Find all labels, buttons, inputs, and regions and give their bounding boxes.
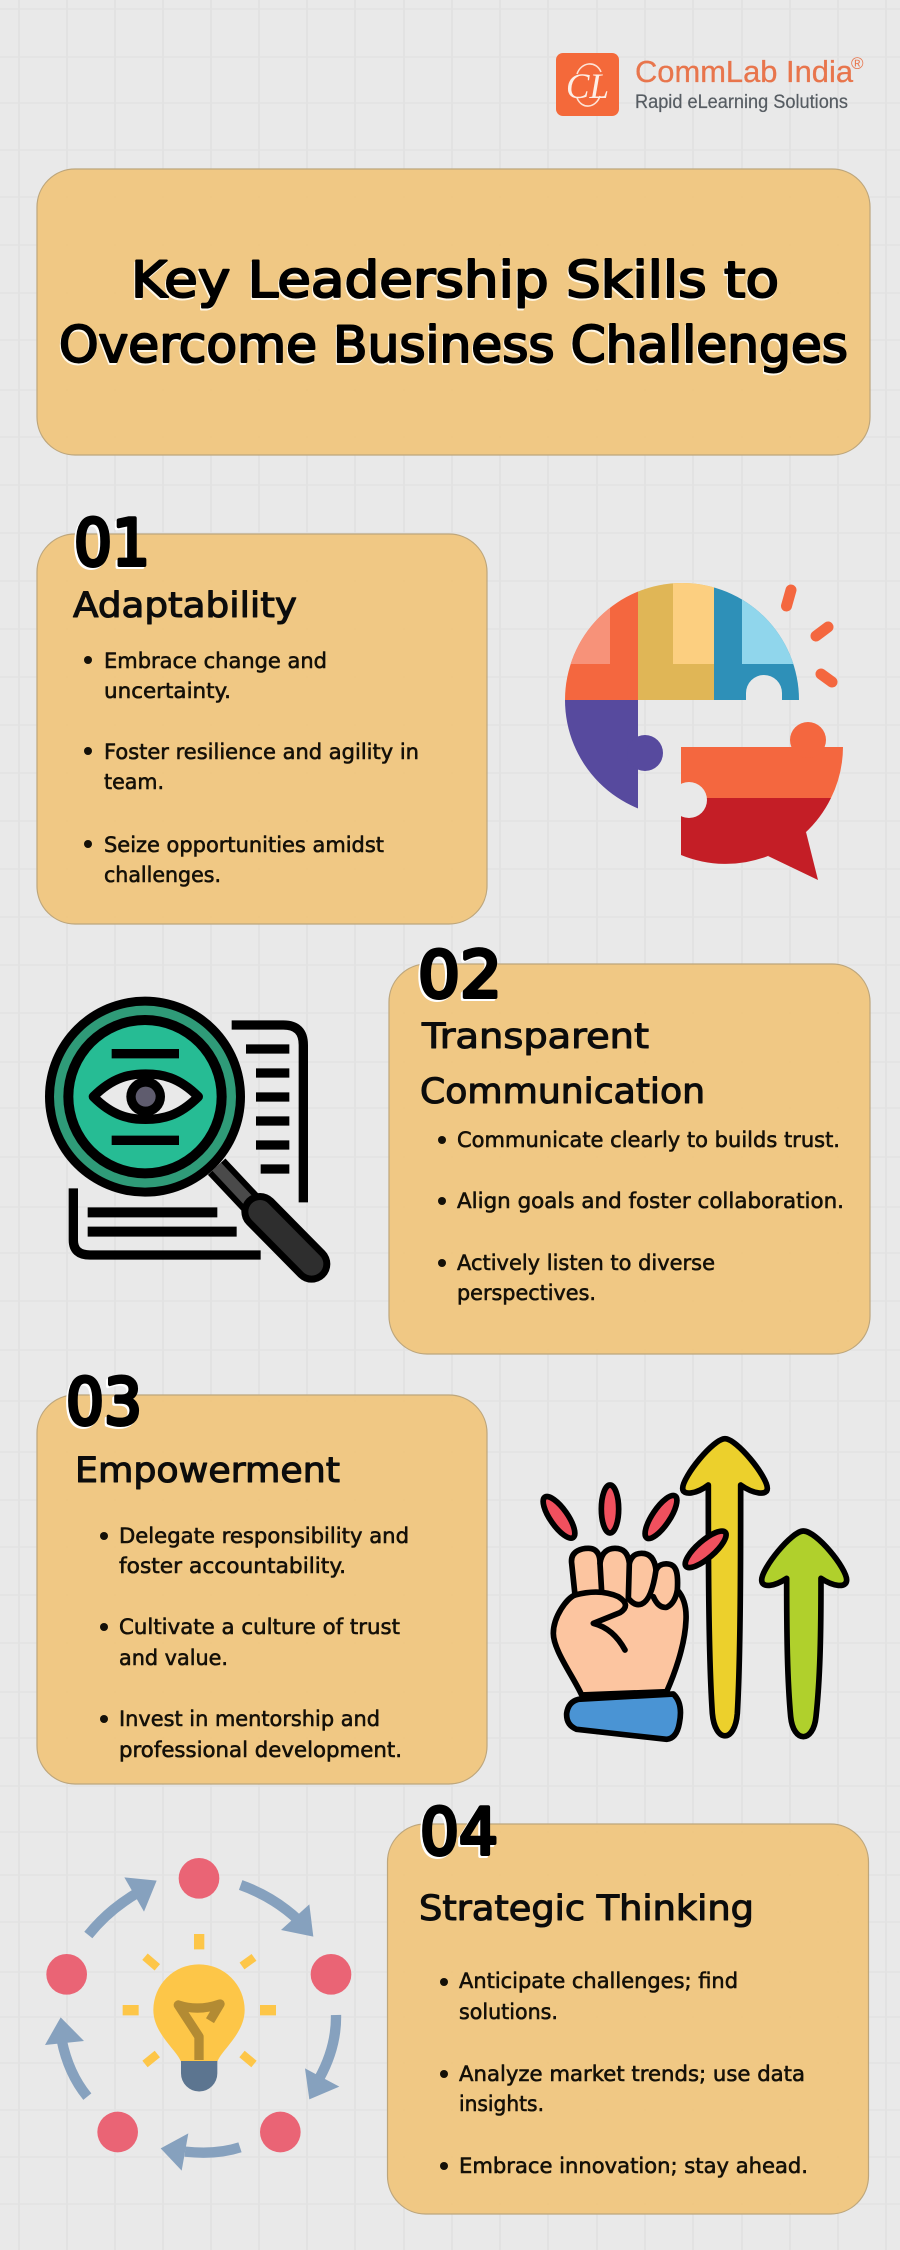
bullet list: Cultivate a culture of trust: [119, 1615, 400, 1640]
bullet list: foster accountability.: [119, 1554, 346, 1579]
icon: light bulb with cycle of arrows: [45, 1858, 351, 2171]
bullet list: uncertainty.: [104, 679, 231, 704]
panel: 01 Adaptability: [37, 507, 487, 924]
registered mark: ®: [851, 54, 864, 73]
title: Key Leadership Skills to: [131, 251, 779, 309]
logo mark: [556, 53, 619, 116]
bullet list: [440, 1969, 808, 2179]
bullet list: Foster resilience and agility in: [104, 740, 419, 765]
title panel: [37, 169, 870, 455]
bullet list: Communicate clearly to builds trust.: [457, 1128, 840, 1153]
number 04: 04: [420, 1796, 498, 1870]
icon: puzzle speech bubble: [565, 583, 843, 880]
logo: CommLab India: [556, 53, 864, 116]
bullet list: [100, 1524, 409, 1763]
heading: Transparent Communication: Communication: [420, 1072, 705, 1112]
bullet list: Align goals and foster collaboration.: [457, 1189, 844, 1214]
icon: raised fist with growth arrows: [538, 1439, 847, 1739]
bullet list: [84, 649, 419, 888]
number 02: 02: [418, 939, 502, 1013]
title: [59, 251, 848, 374]
panel: 04 Strategic Thinking: [388, 1796, 868, 2214]
logo tagline: Rapid eLearning Solutions: [635, 92, 848, 113]
icon: magnifying glass over document: [45, 997, 312, 1264]
heading: Transparent Communication: Transparent: [421, 1017, 649, 1057]
bullet list: challenges.: [104, 863, 221, 888]
bullet list: Delegate responsibility and: [119, 1524, 409, 1549]
bullet list: Embrace change and: [104, 649, 327, 674]
heading: Strategic Thinking: Strategic Thinking: [419, 1889, 754, 1929]
bullet list: Analyze market trends; use data: [459, 2062, 805, 2087]
bullet list: [438, 1128, 844, 1306]
bullet list: Embrace innovation; stay ahead.: [459, 2154, 808, 2179]
heading: Empowerment: Empowerment: [75, 1451, 340, 1491]
panel: 03 Empowerment: [37, 1366, 487, 1784]
bullet list: solutions.: [459, 2000, 558, 2025]
bullet list: team.: [104, 770, 164, 795]
bullet list: Seize opportunities amidst: [104, 833, 384, 858]
bullet list: Invest in mentorship and: [119, 1707, 380, 1732]
number 01: 01: [74, 507, 150, 581]
logo name: CommLab India: [635, 54, 854, 89]
bullet list: professional development.: [119, 1738, 402, 1763]
bullet list: insights.: [459, 2092, 544, 2117]
logo mark: CL: [566, 66, 609, 106]
heading: Transparent Communication: [420, 1017, 705, 1112]
bullet list: Actively listen to diverse: [457, 1251, 715, 1276]
title: Overcome Business Challenges: [59, 316, 848, 374]
number 03: 03: [66, 1366, 142, 1440]
heading: Adaptability: Adaptability: [73, 586, 297, 626]
bullet list: Anticipate challenges; find: [459, 1969, 738, 1994]
panel: 02 Transparent Communication: [389, 939, 870, 1354]
bullet list: and value.: [119, 1646, 228, 1671]
bullet list: perspectives.: [457, 1281, 596, 1306]
